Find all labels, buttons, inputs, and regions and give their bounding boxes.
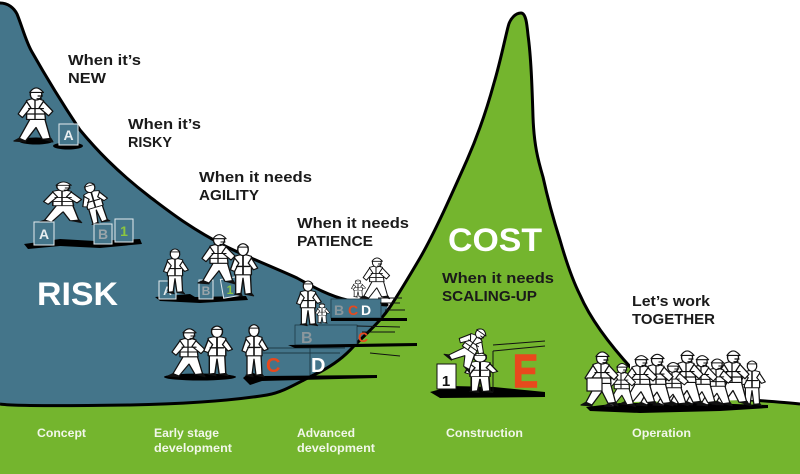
- scene: lower platform with C and D: [242, 325, 377, 385]
- scene: middle platform with B and C: B: [301, 330, 313, 347]
- scene: scaling-up with box 1 and large E: 1: [442, 373, 450, 390]
- text: when it's risky: RISKY: [128, 134, 172, 151]
- scene: top platform with B, C and D: [331, 258, 407, 321]
- phase label: early stage development: Early stage: [154, 426, 219, 440]
- phase label: early stage development: [154, 426, 232, 455]
- scene: lower platform with C and D: C: [266, 355, 280, 377]
- phase label: advanced development: development: [297, 441, 375, 455]
- scene: scaling-up with box 1 and large E: E: [513, 345, 538, 397]
- phase label: advanced development: [297, 426, 375, 455]
- text: when it's new: NEW: [68, 70, 107, 87]
- scene: two people reaching across boxes A, B, 1: [24, 179, 142, 249]
- title: RISK: RISK: [37, 276, 118, 312]
- scene: two people reaching across boxes A, B, 1: A: [39, 226, 49, 242]
- title: COST: COST: [448, 222, 542, 258]
- text: when it needs agility: [199, 169, 312, 204]
- scene: agility team with boxes: B: [202, 284, 211, 298]
- scene: agility team with boxes: 1: [227, 283, 234, 297]
- risk curve outline: [0, 3, 387, 305]
- text: when it needs agility: When it needs: [199, 169, 312, 186]
- scene: top platform with B, C and D: D: [361, 302, 371, 318]
- text: when it needs patience: [297, 215, 409, 250]
- scene: new worker with box A: [14, 88, 83, 150]
- scene: top platform with B, C and D: C: [348, 302, 358, 318]
- scene: agility team with boxes: [155, 235, 258, 303]
- scene: new worker with box A: A: [63, 127, 74, 143]
- scene: two people reaching across boxes A, B, 1: B: [98, 226, 108, 242]
- text: when it needs scaling-up: SCALING-UP: [442, 288, 537, 305]
- scene: two people reaching across boxes A, B, 1: 1: [120, 223, 128, 239]
- text: when it needs agility: AGILITY: [199, 187, 259, 204]
- text: when it's risky: [128, 116, 201, 151]
- scene: agility team with boxes: A: [163, 284, 172, 298]
- text: when it's new: When it’s: [68, 52, 141, 69]
- text: when it's risky: When it’s: [128, 116, 201, 133]
- text: let's work together: TOGETHER: [632, 311, 715, 328]
- text: when it needs patience: PATIENCE: [297, 233, 373, 250]
- scene: middle platform with B and C: C: [358, 329, 368, 345]
- text: let's work together: [632, 293, 715, 328]
- scene: team walking together: [581, 351, 768, 413]
- scene: top platform with B, C and D: B: [334, 302, 344, 318]
- phase label: early stage development: development: [154, 441, 232, 455]
- text: when it needs patience: When it needs: [297, 215, 409, 232]
- phase label: operation: Operation: [632, 426, 691, 440]
- phase label: advanced development: Advanced: [297, 426, 355, 440]
- text: when it needs scaling-up: When it needs: [442, 270, 554, 287]
- text: when it needs scaling-up: [442, 270, 554, 305]
- text: when it's new: [68, 52, 141, 87]
- scene: lower platform with C and D: D: [311, 355, 325, 377]
- background: blue risk slope: [0, 3, 400, 410]
- phase label: construction: Construction: [446, 426, 523, 440]
- scene: middle platform with B and C: [288, 281, 417, 356]
- scene: scaling-up with box 1 and large E: [430, 319, 545, 398]
- phase label: concept: Concept: [37, 426, 86, 440]
- scene: two walkers talking: [164, 326, 236, 380]
- text: let's work together: Let’s work: [632, 293, 711, 310]
